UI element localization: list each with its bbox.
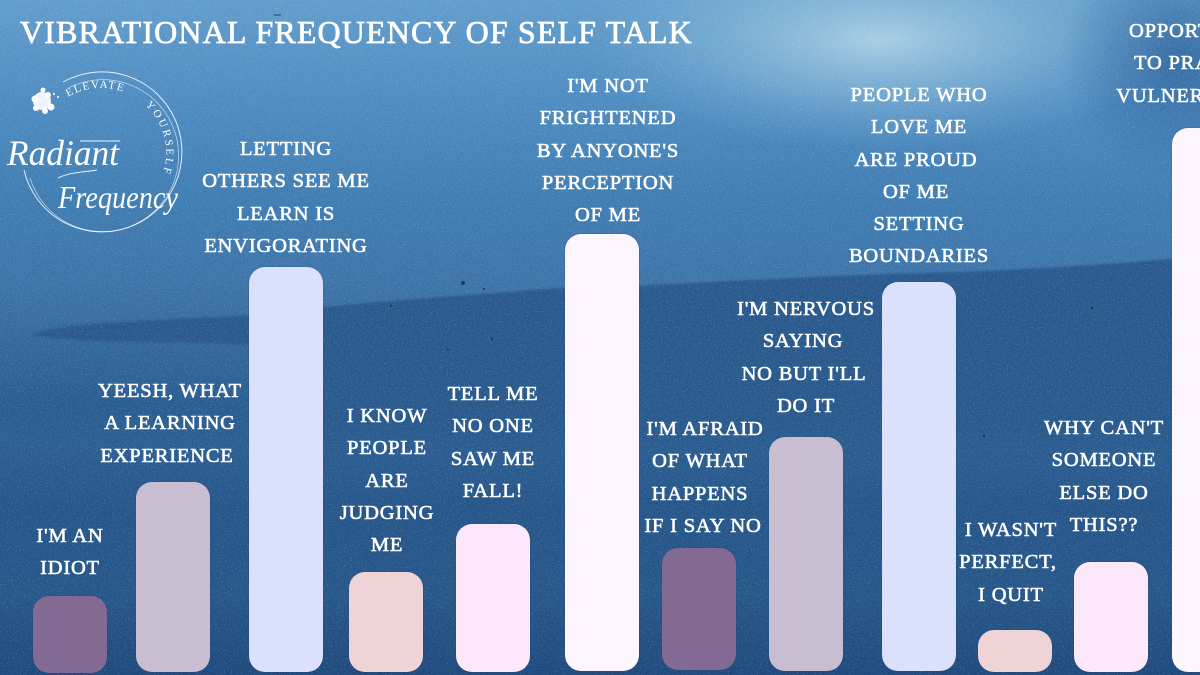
label 5: NO ONE — [452, 415, 534, 437]
label 2: EXPERIENCE — [100, 445, 234, 467]
bar 8 — [769, 437, 843, 671]
label 11: ELSE DO — [1059, 482, 1149, 504]
label 9 — [849, 84, 989, 267]
label 7: IF I SAY NO — [644, 515, 762, 537]
label 4 — [340, 405, 434, 556]
label 6: FRIGHTENED — [540, 107, 676, 129]
bar 7 — [662, 548, 736, 670]
label 9: ARE PROUD — [855, 149, 977, 171]
icon: dandelion — [32, 88, 59, 114]
bar 2 — [136, 482, 210, 672]
label 1: I'M AN — [36, 525, 104, 547]
label 7 — [644, 418, 764, 537]
label 10: I QUIT — [978, 584, 1044, 606]
label 11: THIS?? — [1070, 514, 1138, 536]
label 9: SETTING — [873, 213, 964, 235]
bar 3 — [249, 267, 323, 672]
label 1 — [36, 239, 1144, 670]
label 12 — [1116, 20, 1200, 107]
label 4: ME — [371, 534, 403, 556]
logo tagline: yourself: YOURSELF — [147, 100, 174, 174]
logo script: Frequency: Frequency — [57, 179, 179, 215]
label 3: LEARN IS — [237, 203, 335, 225]
label 6 — [537, 75, 679, 226]
label 9: BOUNDARIES — [849, 245, 989, 267]
bar 4 — [349, 572, 423, 672]
label 9: OF ME — [883, 181, 949, 203]
label 7: I'M AFRAID — [646, 418, 764, 440]
bar 9 — [882, 282, 956, 671]
label 4: JUDGING — [340, 502, 434, 524]
label 4: I KNOW — [347, 405, 427, 427]
label 10 — [959, 519, 1057, 606]
label 5: TELL ME — [448, 383, 538, 405]
label 5 — [448, 383, 538, 502]
label 9: PEOPLE WHO — [851, 84, 987, 106]
label 6: PERCEPTION — [542, 172, 674, 194]
label 6: OF ME — [575, 204, 641, 226]
label 3 — [202, 138, 370, 257]
logo flourishes — [58, 141, 120, 178]
label 1: IDIOT — [40, 557, 100, 579]
logo rings — [24, 72, 182, 232]
bar 6 — [565, 234, 639, 671]
bar 12 — [1172, 128, 1200, 672]
title: VIBRATIONAL FREQUENCY OF SELF TALK — [20, 14, 693, 50]
label 2 — [98, 239, 1144, 670]
label 4: ARE — [365, 470, 409, 492]
label 10: I WASN'T — [965, 519, 1057, 541]
label 11: SOMEONE — [1052, 449, 1156, 471]
label 5: SAW ME — [451, 448, 535, 470]
logo tagline: elevate: ELEVATE — [64, 80, 124, 97]
label 8: DO IT — [777, 395, 835, 417]
label 7: OF WHAT — [652, 450, 748, 472]
label 10: PERFECT, — [959, 551, 1057, 573]
label 8 — [737, 298, 875, 417]
label 2: YEESH, WHAT — [98, 380, 242, 402]
label 8: SAYING — [763, 330, 843, 352]
label 6: I'M NOT — [567, 75, 649, 97]
label 3: LETTING — [240, 138, 332, 160]
label 11 — [1044, 417, 1164, 536]
bar 1 — [33, 596, 107, 673]
label 2: A LEARNING — [104, 412, 236, 434]
label 7: HAPPENS — [652, 483, 748, 505]
label 8: I'M NERVOUS — [737, 298, 875, 320]
label 9: LOVE ME — [871, 116, 967, 138]
label 5: FALL! — [463, 480, 523, 502]
bar 5 — [456, 524, 530, 672]
bar 11 — [1074, 562, 1148, 672]
label 8: NO BUT I'LL — [742, 363, 866, 385]
label 6: BY ANYONE'S — [537, 140, 679, 162]
logo script: Radiant: Radiant — [6, 133, 120, 173]
label 3: ENVIGORATING — [204, 235, 368, 257]
bar 10 — [978, 630, 1052, 672]
label 11: WHY CAN'T — [1044, 417, 1164, 439]
label 3: OTHERS SEE ME — [202, 170, 370, 192]
label 4: PEOPLE — [347, 437, 427, 459]
